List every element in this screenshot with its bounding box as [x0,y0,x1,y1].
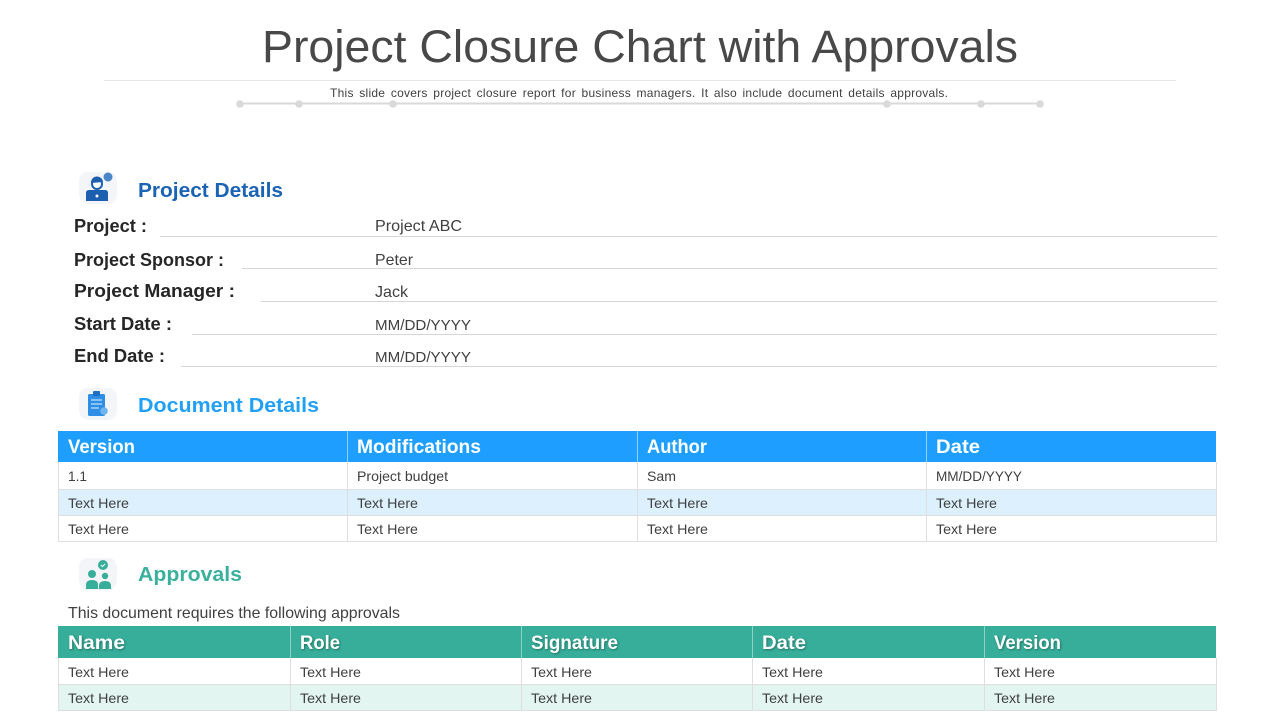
table row 3: Text Here [68,521,129,537]
table row 1: Sam [647,468,676,484]
panel: approvals [58,558,1216,710]
field: end date: MM/DD/YYYY [375,349,471,366]
table row 1: Text Here [531,664,592,680]
table: document details [58,431,1216,542]
subtitle: This slide covers project closure report for business managers. It also include document details approvals. [330,86,948,100]
field: project: Project ABC [375,218,462,235]
table row 1: Text Here [300,664,361,680]
field: start date [74,313,1217,334]
field: project manager [74,280,1217,302]
field: project sponsor: Project Sponsor : [74,249,224,270]
table row 1: Text Here [994,664,1055,680]
table row 1: 1.1 [68,468,87,484]
table row 2: Text Here [357,495,418,511]
table header: Date [762,632,806,654]
table row 2: Text Here [531,690,592,706]
table header [58,431,1216,462]
table row 3: Text Here [357,521,418,537]
table header [58,626,1216,658]
table row 2: Text Here [994,690,1055,706]
table: approvals [58,626,1216,710]
field: project [74,215,1217,236]
field: project manager: Jack [375,284,409,301]
field: project: Project : [74,215,147,236]
field: start date: MM/DD/YYYY [375,317,471,334]
table header: Modifications [357,436,481,458]
table row 2: Text Here [647,495,708,511]
panel: project details [74,172,1217,366]
icon: project person at laptop [79,172,117,204]
heading: project details: Project Details [138,180,283,202]
field: end date [74,345,1217,366]
decorative timeline [236,100,1044,108]
table row 1: MM/DD/YYYY [936,468,1023,484]
field: project sponsor: Peter [375,252,414,269]
table row 2: Text Here [68,495,129,511]
table row 1: Project budget [357,468,448,484]
table row 3 [68,521,997,537]
icon: approving people [79,558,117,590]
table row 3: Text Here [936,521,997,537]
table header: Author [647,436,707,458]
table row 2 [68,495,997,511]
table header: Signature [531,632,618,654]
table row 2: Text Here [68,690,129,706]
field: end date: End Date : [74,345,165,366]
table header: Role [300,632,340,654]
table row 2: Text Here [300,690,361,706]
table row 1 [68,468,1023,484]
table row 1: Text Here [68,664,129,680]
intro text: This document requires the following approvals [68,605,400,622]
table header: Name [68,632,125,654]
table header: Version [68,436,135,458]
table row 1 [68,664,1055,680]
field: project sponsor [74,249,1217,270]
field: project manager: Project Manager : [74,280,235,301]
panel: document details [58,388,1216,542]
table row 1: Text Here [762,664,823,680]
table row 2: Text Here [762,690,823,706]
heading: document details: Document Details [138,395,319,417]
heading: approvals: Approvals [138,564,242,586]
table header: Date [936,436,980,458]
field: start date: Start Date : [74,313,172,334]
table row 2: Text Here [936,495,997,511]
icon: clipboard checklist [79,388,117,420]
title: Project Closure Chart with Approvals [262,21,1018,72]
table header: Version [994,632,1061,654]
table row 3: Text Here [647,521,708,537]
table row 2 [68,690,1055,706]
